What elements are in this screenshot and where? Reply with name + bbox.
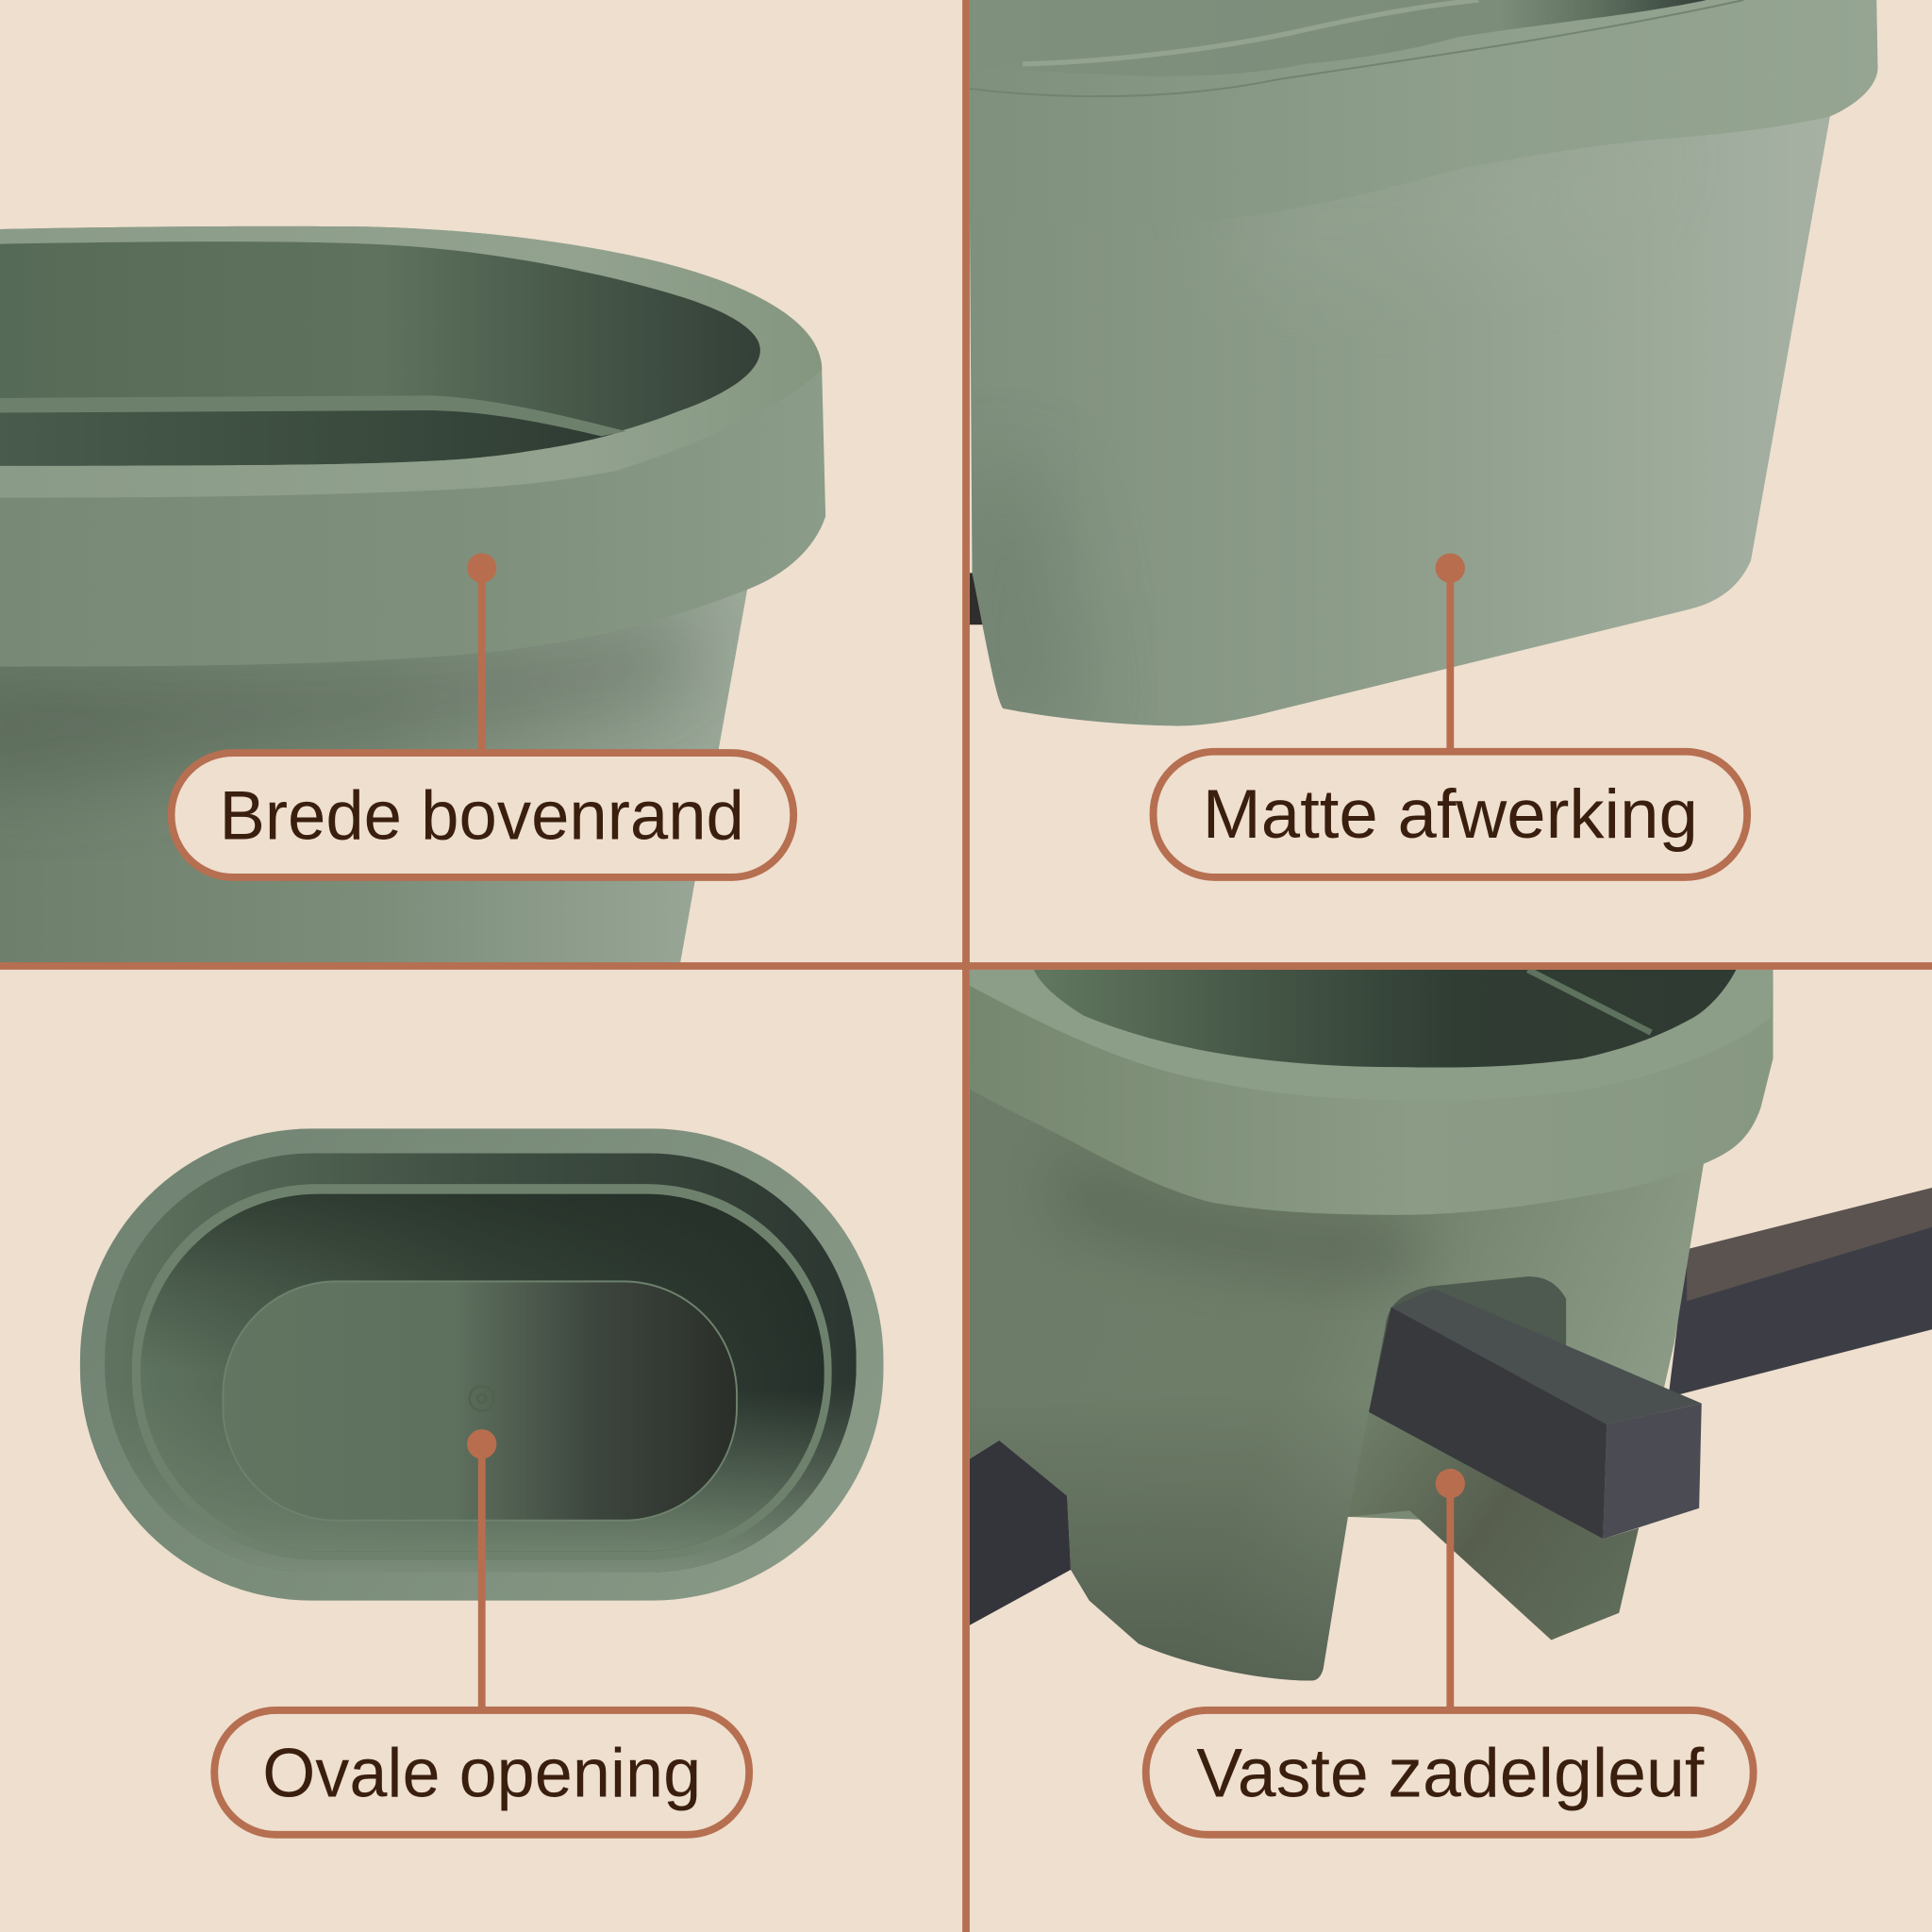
leader line	[1446, 1484, 1454, 1710]
ledge ring	[132, 1184, 832, 1560]
rim ledge line	[970, 0, 1743, 96]
leader line	[478, 1444, 486, 1710]
callout: brede bovenrand	[172, 553, 793, 877]
rim band	[970, 0, 1878, 225]
panel: brede bovenrand	[0, 226, 825, 963]
pot body	[970, 1059, 1707, 1681]
leader line	[478, 568, 486, 753]
back leg	[1348, 1412, 1639, 1640]
rim band	[0, 226, 825, 667]
rim interior	[0, 242, 760, 466]
rim band	[970, 970, 1774, 1215]
marker dot	[467, 1429, 496, 1458]
inner ledge	[1528, 970, 1651, 1033]
rail stub	[970, 573, 983, 625]
pill	[1146, 1710, 1754, 1835]
panel: matte afwerking	[949, 0, 1878, 740]
front rail	[1369, 1289, 1702, 1539]
drain mark	[468, 1385, 487, 1411]
label: Vaste zadelgleuf	[1196, 1735, 1705, 1811]
leader line	[1446, 568, 1454, 753]
rim top surface	[0, 226, 822, 498]
label: Ovale opening	[262, 1735, 701, 1811]
pot body	[949, 111, 1831, 740]
arch dark	[1369, 1276, 1566, 1412]
pill	[1154, 752, 1747, 877]
bowl inside	[141, 1194, 824, 1551]
rim outer	[80, 1128, 883, 1601]
label: Matte afwerking	[1203, 776, 1698, 853]
ledge highlight	[0, 395, 626, 436]
callout: ovale opening	[214, 1429, 749, 1835]
callout: vaste zadelgleuf	[1146, 1469, 1754, 1835]
left rail	[970, 1441, 1071, 1625]
marker dot	[1436, 553, 1465, 583]
marker dot	[1436, 1469, 1465, 1498]
pill	[214, 1710, 749, 1835]
panel: ovale opening	[80, 1128, 883, 1601]
rim interior	[1034, 970, 1736, 1068]
label: Brede bovenrand	[219, 777, 744, 854]
pot body	[0, 579, 749, 963]
inner ledge	[0, 410, 617, 466]
callout: matte afwerking	[1154, 553, 1747, 877]
marker dot	[467, 553, 496, 583]
rim interior	[1174, 0, 1706, 75]
pill	[172, 753, 793, 877]
floor	[223, 1281, 737, 1521]
inner wall	[105, 1154, 857, 1573]
back rail	[1668, 1188, 1932, 1397]
rim top surface	[970, 970, 1774, 1101]
inner ledge line	[1023, 0, 1478, 64]
panel: vaste zadelgleuf	[970, 970, 1932, 1681]
